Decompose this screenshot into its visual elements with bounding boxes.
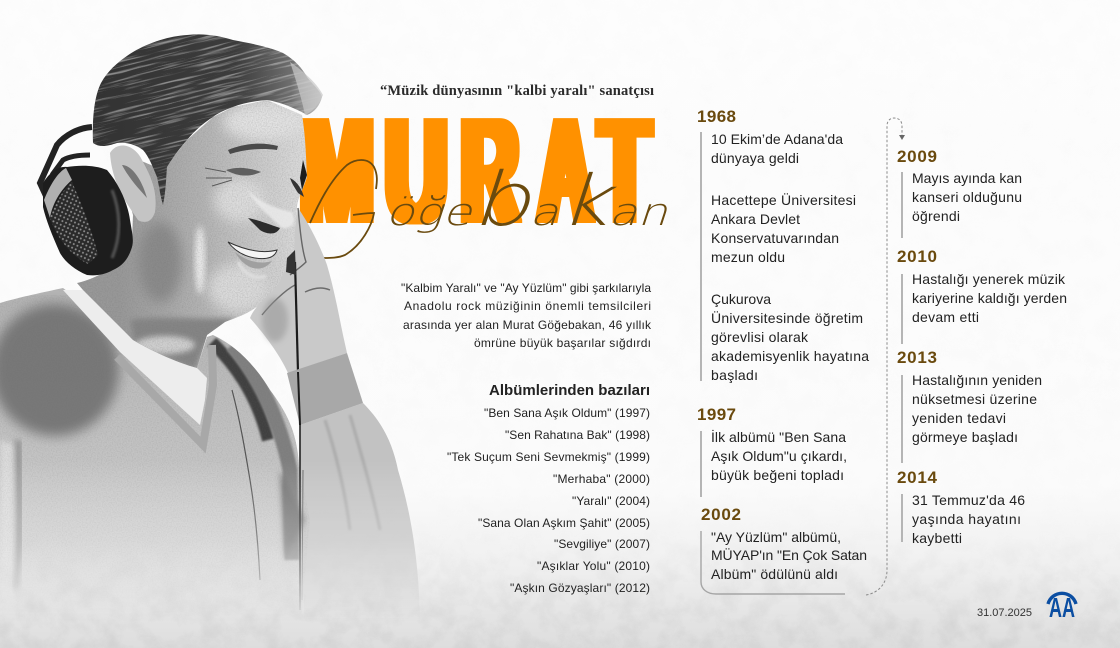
description: "Kalbim Yaralı" ve "Ay Yüzlüm" gibi şarkılarıyla	[401, 281, 651, 295]
timeline: right column: yaşında hayatını	[912, 511, 1021, 527]
title: MURAT	[300, 88, 650, 254]
timeline: left column: Ankara Devlet	[711, 211, 800, 227]
year 1997: 1997	[697, 405, 736, 424]
year 2009: 2009	[897, 147, 937, 166]
description	[401, 281, 652, 350]
hair	[92, 34, 323, 205]
timeline: right column: Mayıs ayında kan	[912, 170, 1022, 186]
timeline: right column: görmeye başladı	[912, 429, 1018, 445]
albums list: "Sana Olan Aşkım Şahit" (2005)	[478, 516, 650, 530]
year 2013: 2013	[897, 348, 937, 367]
timeline: right column: öğrendi	[912, 208, 960, 224]
arrow: dashed connector between columns	[866, 118, 905, 595]
timeline: left column: Albüm" ödülünü aldı	[711, 566, 838, 582]
timeline: left column: "Ay Yüzlüm" albümü,	[711, 529, 841, 545]
timeline: right column: kaybetti	[912, 530, 962, 546]
year 2002: 2002	[701, 505, 741, 524]
albums list: "Tek Suçum Seni Sevmekmiş" (1999)	[447, 450, 650, 464]
title: MURAT: U	[386, 88, 447, 254]
timeline: right column: 31 Temmuz'da 46	[912, 492, 1025, 508]
ear	[110, 146, 156, 222]
timeline: left column: dünyaya geldi	[711, 150, 799, 166]
albums list: "Merhaba" (2000)	[553, 472, 650, 486]
albums list: "Ben Sana Aşık Oldum" (1997)	[484, 406, 650, 420]
timeline: left column: başladı	[711, 367, 758, 383]
timeline: left column: Üniversitesinde öğretim	[711, 309, 863, 326]
albums list: "Sevgiliye" (2007)	[554, 537, 650, 551]
timeline: left column: Aşık Oldum"u çıkardı,	[711, 448, 847, 464]
timeline: left column: Çukurova	[711, 291, 771, 307]
date: 31.07.2025	[977, 607, 1032, 619]
sleeve cuff	[287, 353, 363, 425]
icon: AA logo: AA	[1049, 592, 1075, 623]
icon: AA logo	[1048, 592, 1076, 623]
timeline: left column: Konservatuvarından	[711, 230, 839, 246]
facial features	[205, 144, 307, 277]
albums list: "Sen Rahatına Bak" (1998)	[505, 428, 650, 442]
white shirt collar	[63, 290, 207, 425]
timeline: right column: yeniden tedavi	[912, 410, 1006, 426]
timeline: right column: Hastalığının yeniden	[912, 372, 1042, 388]
timeline: left column: görevlisi olarak	[711, 329, 809, 345]
description: ömrüne büyük başarılar sığdırdı	[474, 336, 651, 350]
hand on headphone	[250, 208, 347, 373]
title script: Göğebakan: öğebakan	[379, 157, 689, 243]
timeline: left column: İlk albümü "Ben Sana	[711, 428, 846, 445]
title: MURAT: R	[462, 88, 518, 254]
timeline: right column: kanseri olduğunu	[912, 189, 1022, 205]
timeline: left column: büyük beğeni topladı	[711, 467, 844, 483]
year 2014: 2014	[897, 468, 938, 487]
sweater and torso	[0, 288, 420, 635]
albums list: "Yaralı" (2004)	[572, 494, 650, 508]
timeline: left column: MÜYAP'ın "En Çok Satan	[711, 546, 867, 563]
tagline: “Müzik dünyasının "kalbi yaralı" sanatçısı	[380, 83, 654, 99]
albums list: "Aşıklar Yolu" (2010)	[537, 559, 650, 573]
title: MURAT: A	[539, 88, 592, 254]
title: MURAT: M	[300, 88, 374, 254]
portrait: man with headphones	[0, 0, 420, 635]
timeline: left column: mezun oldu	[711, 249, 785, 265]
title: MURAT: T	[599, 88, 650, 254]
year 2010: 2010	[897, 247, 937, 266]
V-neck trim	[117, 345, 213, 445]
timeline: left column: 10 Ekim’de Adana'da	[711, 131, 843, 147]
timeline: right column: devam etti	[912, 309, 979, 325]
description: Anadolu rock müziğinin önemli temsilcileri	[404, 299, 651, 313]
headphones	[40, 127, 133, 275]
timeline: left column: Hacettepe Üniversitesi	[711, 191, 856, 208]
timeline: right column	[897, 147, 1067, 546]
title script: Göğebakan	[310, 157, 689, 258]
timeline: right column: kariyerine kaldığı yerden	[912, 290, 1067, 306]
timeline: right column: nüksetmesi üzerine	[912, 391, 1037, 407]
albums list	[447, 382, 650, 595]
year 1968: 1968	[697, 107, 736, 126]
timeline: left column	[697, 107, 869, 594]
description: arasında yer alan Murat Göğebakan, 46 yıllık	[403, 318, 652, 332]
neck and face	[75, 100, 310, 370]
albums heading: Albümlerinden bazıları	[489, 382, 650, 399]
albums list: "Aşkın Gözyaşları" (2012)	[510, 581, 650, 595]
timeline: right column: Hastalığı yenerek müzik	[912, 271, 1066, 287]
timeline: left column: akademisyenlik hayatına	[711, 348, 869, 364]
